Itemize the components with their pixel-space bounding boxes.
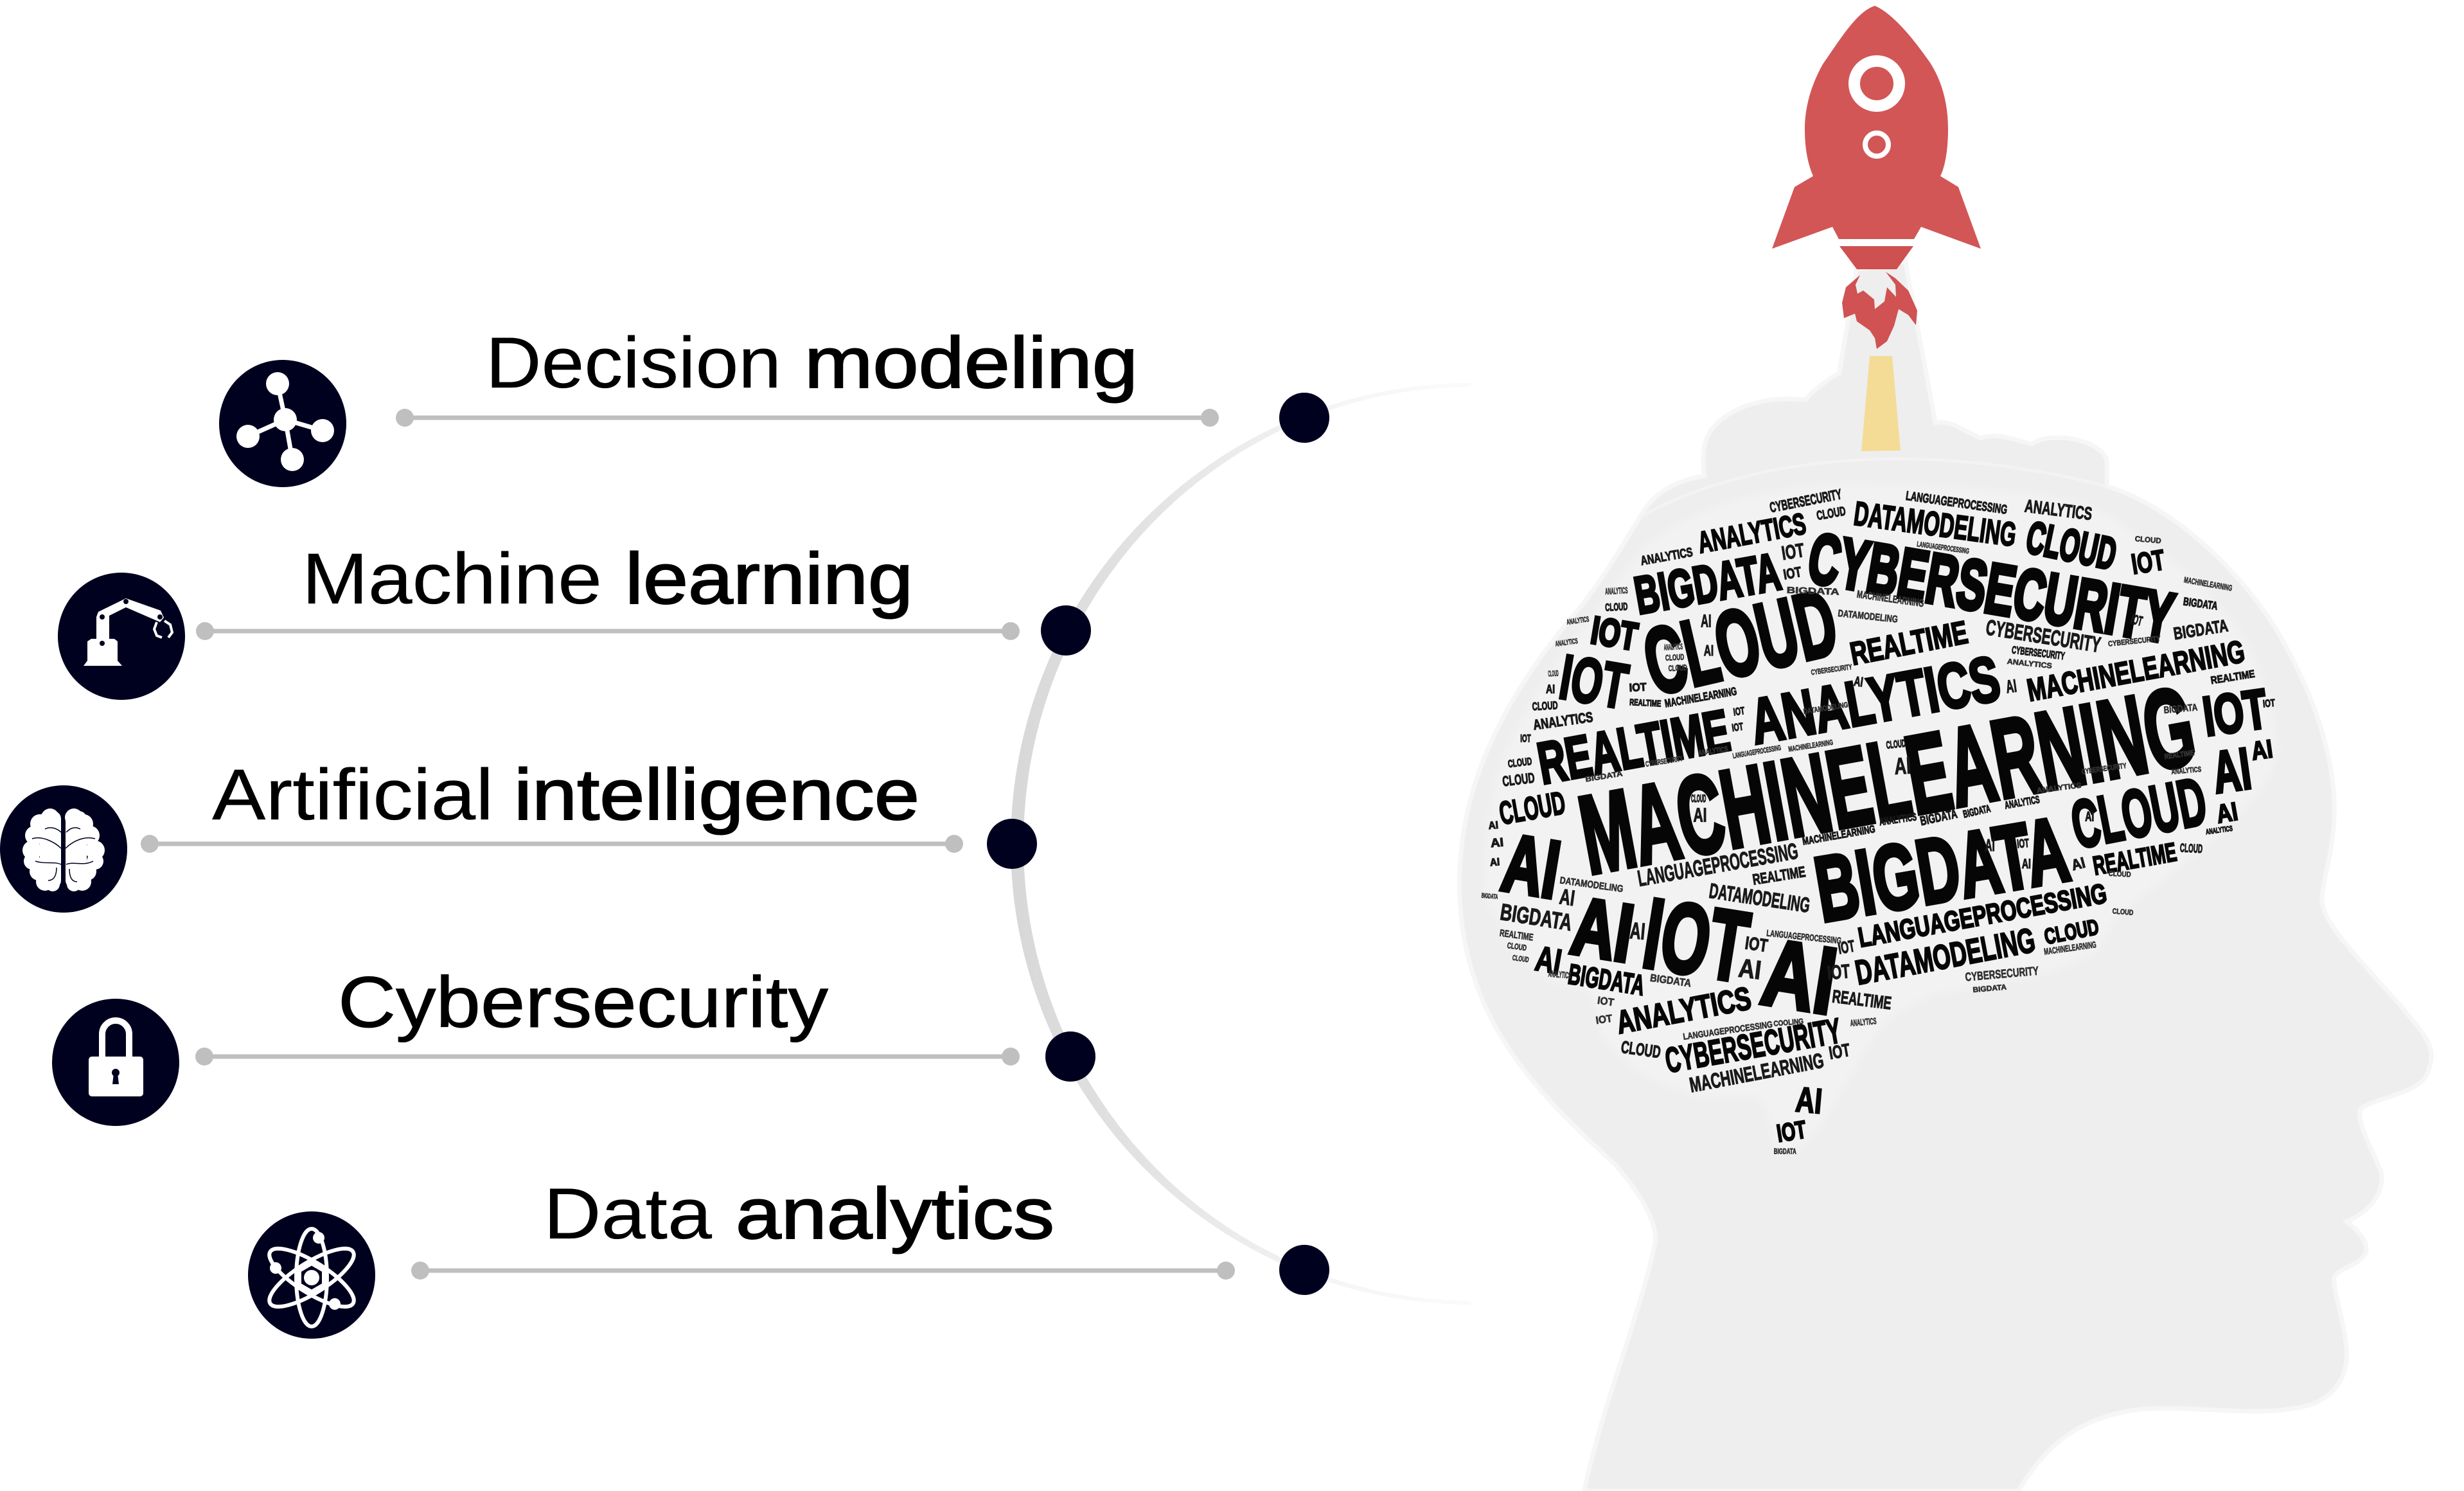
word cloud brain: MACHINELEARNING bbox=[1856, 589, 1925, 609]
rocket flame bbox=[1842, 272, 1917, 349]
word cloud brain: MACHINELEARNING bbox=[2183, 575, 2233, 593]
word cloud brain: CYBERSECURITY bbox=[1811, 663, 1852, 677]
word cloud brain: IOT bbox=[1837, 937, 1856, 958]
item: Data analytics bbox=[248, 1174, 1329, 1339]
icon: robot arm bbox=[58, 573, 185, 700]
label: modeling bbox=[804, 323, 1138, 403]
word cloud brain: DATAMODELING bbox=[1838, 608, 1899, 625]
label bbox=[486, 323, 1138, 403]
word cloud brain: MACHINELEARNING bbox=[1663, 684, 1738, 710]
icon: brain bbox=[0, 785, 127, 913]
node bbox=[987, 819, 1037, 869]
word cloud brain: CLOUD bbox=[2065, 763, 2212, 863]
word cloud brain: ANALYTICS bbox=[1850, 1015, 1877, 1028]
word cloud brain: ANALYTICS bbox=[2171, 765, 2202, 776]
word cloud brain: ANALYTICS bbox=[1548, 969, 1572, 981]
word cloud brain: MACHINELEARNING bbox=[1687, 1048, 1825, 1097]
node bbox=[1279, 1245, 1329, 1295]
word cloud brain: CLOUD bbox=[1502, 769, 1536, 789]
rocket nozzle bbox=[1839, 246, 1913, 269]
word cloud brain: CLOUD bbox=[1548, 668, 1559, 679]
word cloud brain: CLOUD bbox=[1512, 954, 1529, 964]
word cloud brain: REALTIME bbox=[1847, 614, 1971, 672]
word cloud brain: ANALYTICS bbox=[1605, 585, 1628, 596]
word cloud brain: CYBERSECURITY bbox=[1803, 518, 2179, 658]
word cloud brain: ANALYTICS bbox=[1745, 643, 2005, 758]
word cloud brain: IOT bbox=[2129, 612, 2144, 629]
word cloud brain: CYBERSECURITY bbox=[2081, 762, 2127, 776]
word cloud brain: IOT bbox=[1782, 564, 1803, 583]
word cloud brain: BIGDATA bbox=[1972, 983, 2007, 994]
word cloud brain: MACHINELEARNING bbox=[1802, 823, 1876, 848]
word cloud brain: ANALYTICS bbox=[1879, 811, 1917, 828]
word cloud brain: CLOUD bbox=[1507, 756, 1532, 770]
word cloud brain: ANALYTICS bbox=[1697, 745, 1729, 757]
word cloud brain: ANALYTICS bbox=[2036, 781, 2082, 795]
icon: padlock bbox=[52, 999, 179, 1126]
brain backdrop bbox=[1484, 483, 2278, 1154]
word cloud brain: BIGDATA bbox=[1919, 807, 1958, 828]
word cloud brain: ANALYTICS bbox=[1532, 709, 1594, 733]
label: Artificial bbox=[212, 754, 493, 835]
word cloud brain: IOT bbox=[1595, 1013, 1613, 1026]
label bbox=[302, 539, 913, 619]
word cloud brain: CLOUD bbox=[1668, 663, 1687, 673]
word cloud brain: REALTIME bbox=[1499, 927, 1534, 943]
label: learning bbox=[625, 539, 913, 619]
icon: atom bbox=[248, 1211, 375, 1339]
word cloud brain: REALTIME bbox=[1831, 987, 1893, 1013]
word cloud brain: AI bbox=[1853, 674, 1864, 690]
word cloud brain: COOLING bbox=[1773, 1017, 1804, 1028]
word cloud brain: ANALYTICS bbox=[1613, 979, 1754, 1040]
word cloud brain bbox=[1481, 486, 2276, 1156]
word cloud brain: BIGDATA bbox=[1566, 959, 1647, 1002]
word cloud brain: CLOUD bbox=[2108, 870, 2131, 879]
word cloud brain: AI bbox=[2214, 798, 2240, 829]
word cloud brain: CLOUD bbox=[1635, 570, 1846, 715]
icon: network bbox=[219, 360, 346, 487]
word cloud brain: BIGDATA bbox=[2183, 595, 2219, 612]
word cloud brain: BIGDATA bbox=[1786, 585, 1839, 597]
word cloud brain: IOT bbox=[1827, 1040, 1852, 1063]
label: Decision bbox=[486, 323, 781, 403]
label: intelligence bbox=[514, 754, 919, 835]
word cloud brain: MACHINELEARNING bbox=[1788, 738, 1834, 754]
exhaust beam bbox=[1861, 356, 1901, 451]
word cloud brain: AI bbox=[2005, 675, 2018, 697]
word cloud brain: AI bbox=[1496, 817, 1566, 915]
word cloud brain: IOT bbox=[1555, 641, 1633, 722]
word cloud brain: AI bbox=[2249, 735, 2274, 765]
word cloud brain: CLOUD bbox=[2134, 535, 2161, 546]
word cloud brain: AI bbox=[1985, 837, 1995, 855]
word cloud brain: LANGUAGEPROCESSING bbox=[1636, 839, 1800, 891]
word cloud brain: LANGUAGEPROCESSING bbox=[1732, 744, 1782, 760]
word cloud brain: AI bbox=[2022, 857, 2031, 871]
word cloud brain: CLOUD bbox=[2179, 841, 2203, 855]
word cloud brain: CLOUD bbox=[1886, 738, 1906, 751]
item: Artificial intelligence bbox=[0, 754, 1037, 913]
word cloud brain: AI bbox=[1794, 1079, 1824, 1121]
word cloud brain: IOT bbox=[1731, 721, 1744, 734]
connector line bbox=[411, 1262, 1235, 1280]
word cloud brain: IOT bbox=[1744, 933, 1769, 956]
word cloud brain: AI bbox=[1893, 752, 1911, 780]
label bbox=[212, 754, 919, 835]
word cloud brain: BIGDATA bbox=[1774, 1148, 1796, 1156]
word cloud brain: BIGDATA bbox=[1498, 898, 1574, 936]
word cloud brain: CYBERSECURITY bbox=[2107, 634, 2161, 648]
word cloud brain: BIGDATA bbox=[1585, 769, 1624, 783]
word cloud brain: CYBERSECURITY bbox=[1768, 486, 1843, 515]
word cloud brain: REALTIME bbox=[1629, 697, 1662, 709]
word cloud brain: BIGDATA bbox=[1962, 803, 1992, 821]
word cloud brain: ANALYTICS bbox=[1555, 637, 1579, 648]
word cloud brain: ANALYTICS bbox=[2205, 825, 2233, 836]
word cloud brain: DATAMODELING bbox=[1852, 495, 2019, 554]
word cloud brain: CYBERSECURITY bbox=[2011, 644, 2066, 662]
word cloud brain: BIGDATA bbox=[1481, 892, 1498, 901]
word cloud brain: AI bbox=[1737, 953, 1763, 985]
word cloud brain: ANALYTICS bbox=[2024, 496, 2093, 524]
word cloud brain: IOT bbox=[1629, 681, 1647, 694]
word cloud brain: DATAMODELING bbox=[1803, 701, 1848, 716]
word cloud brain: REALTIME bbox=[2091, 837, 2179, 880]
word cloud brain: IOT bbox=[1520, 733, 1531, 744]
word cloud brain: CLOUD bbox=[1507, 940, 1527, 952]
node bbox=[1045, 1031, 1095, 1082]
rocket body and fins bbox=[1772, 6, 1981, 249]
word cloud brain: AI bbox=[1546, 682, 1555, 695]
head silhouette with smoke cloud bbox=[1460, 262, 2431, 1491]
node bbox=[1041, 605, 1091, 656]
word cloud brain: IOT bbox=[1775, 1116, 1808, 1148]
word cloud brain: CYBERSECURITY bbox=[1662, 1010, 1844, 1080]
word cloud brain: LANGUAGEPROCESSING bbox=[1682, 1019, 1773, 1042]
word cloud brain: CLOUD bbox=[1532, 699, 1558, 713]
node bbox=[1279, 393, 1329, 443]
curved arc connector bbox=[1011, 383, 1471, 1305]
word cloud brain: IOT bbox=[1636, 877, 1756, 1003]
word cloud brain: CLOUD bbox=[1691, 793, 1706, 805]
label: analytics bbox=[736, 1174, 1054, 1254]
word cloud brain: AI bbox=[1558, 884, 1576, 911]
word cloud brain: AI bbox=[1629, 917, 1646, 945]
word cloud brain: AI bbox=[1566, 880, 1640, 979]
word cloud brain: DATAMODELING bbox=[1852, 921, 2038, 992]
word cloud brain: CLOUD bbox=[1816, 504, 1847, 523]
label: Machine bbox=[302, 539, 602, 619]
word cloud brain: LANGUAGEPROCESSING bbox=[1856, 878, 2109, 954]
word cloud brain: AI bbox=[2070, 854, 2087, 873]
word cloud brain: IOT bbox=[1597, 995, 1615, 1008]
word cloud brain: LANGUAGEPROCESSING bbox=[1905, 489, 2008, 517]
word cloud brain: IOT bbox=[2199, 678, 2271, 748]
word cloud brain: AI bbox=[2208, 736, 2255, 806]
word cloud brain: AI bbox=[1704, 642, 1714, 659]
word cloud brain: CLOUD bbox=[1496, 784, 1568, 832]
word cloud brain: CLOUD bbox=[2022, 512, 2121, 579]
word cloud brain: AI bbox=[1488, 819, 1499, 832]
word cloud brain: AI bbox=[1490, 835, 1504, 850]
word cloud brain: ANALYTICS bbox=[2004, 794, 2041, 812]
word cloud brain: AI bbox=[1701, 611, 1712, 630]
word cloud brain: IOT bbox=[2262, 697, 2276, 710]
label: Cybersecurity bbox=[338, 962, 828, 1042]
word cloud brain: IOT bbox=[2016, 836, 2030, 850]
word cloud brain: REALTIME bbox=[1533, 697, 1735, 797]
word cloud brain: BIGDATA bbox=[2172, 616, 2229, 643]
word cloud brain: ANALYTICS bbox=[1566, 615, 1590, 627]
rocket bbox=[1772, 6, 1981, 349]
word cloud brain: ANALYTICS bbox=[2007, 657, 2053, 670]
connector line bbox=[196, 622, 1020, 640]
word cloud brain: ANALYTICS bbox=[1640, 545, 1694, 568]
word cloud brain: CLOUD bbox=[1665, 652, 1685, 663]
word cloud brain: AI bbox=[2085, 809, 2094, 824]
word cloud brain: BIGDATA bbox=[2163, 702, 2198, 716]
word cloud brain: AI bbox=[1532, 938, 1564, 982]
word cloud brain: AI bbox=[1755, 919, 1843, 1034]
word cloud brain: CYBERSECURITY bbox=[1984, 615, 2102, 657]
word cloud brain: BIGDATA bbox=[1808, 798, 2076, 942]
word cloud brain: IOT bbox=[2129, 544, 2167, 580]
word cloud brain: CLOUD bbox=[1620, 1037, 1662, 1062]
label bbox=[544, 1174, 1054, 1254]
word cloud brain: LANGUAGEPROCESSING bbox=[1917, 540, 1970, 556]
word cloud brain: BIGDATA bbox=[1630, 542, 1785, 625]
word cloud brain: IOT bbox=[1733, 705, 1746, 718]
word cloud brain: LANGUAGEPROCESSING bbox=[1766, 927, 1842, 946]
word cloud brain: ANALYTICS bbox=[1695, 506, 1809, 559]
item: Decision modeling bbox=[219, 323, 1329, 487]
word cloud brain: ANALYTICS bbox=[1663, 641, 1683, 652]
connector line bbox=[396, 409, 1219, 427]
label: Data bbox=[544, 1174, 713, 1254]
word cloud brain: DATAMODELING bbox=[1708, 879, 1812, 917]
word cloud brain: AI bbox=[1693, 804, 1707, 826]
connector line bbox=[141, 835, 963, 853]
word cloud brain: DATAMODELING bbox=[1559, 875, 1624, 895]
word cloud brain: IOT bbox=[1588, 609, 1640, 659]
word cloud brain: CYBERSECURITY bbox=[1645, 754, 1683, 769]
word cloud brain: REALTIME bbox=[1751, 863, 1807, 888]
connector line bbox=[195, 1048, 1020, 1066]
item: Machine learning bbox=[58, 539, 1091, 700]
word cloud brain: IOT bbox=[1827, 960, 1851, 984]
word cloud brain: REALTIME bbox=[2164, 749, 2195, 761]
word cloud brain: CLOUD bbox=[2043, 915, 2101, 949]
word cloud brain: MACHINELEARNING bbox=[2043, 939, 2097, 957]
word cloud brain: MACHINELEARNING bbox=[2025, 634, 2247, 708]
word cloud brain: CYBERSECURITY bbox=[1965, 964, 2039, 984]
word cloud brain: CLOUD bbox=[1605, 601, 1628, 614]
word cloud brain: BIGDATA bbox=[1649, 972, 1692, 990]
word cloud brain: IOT bbox=[1780, 539, 1806, 564]
word cloud brain: REALTIME bbox=[2210, 668, 2256, 686]
item: Cybersecurity bbox=[52, 962, 1095, 1126]
word cloud brain: CLOUD bbox=[2112, 907, 2134, 917]
rocket windows bbox=[1854, 61, 1899, 156]
word cloud brain: AI bbox=[1489, 856, 1500, 868]
